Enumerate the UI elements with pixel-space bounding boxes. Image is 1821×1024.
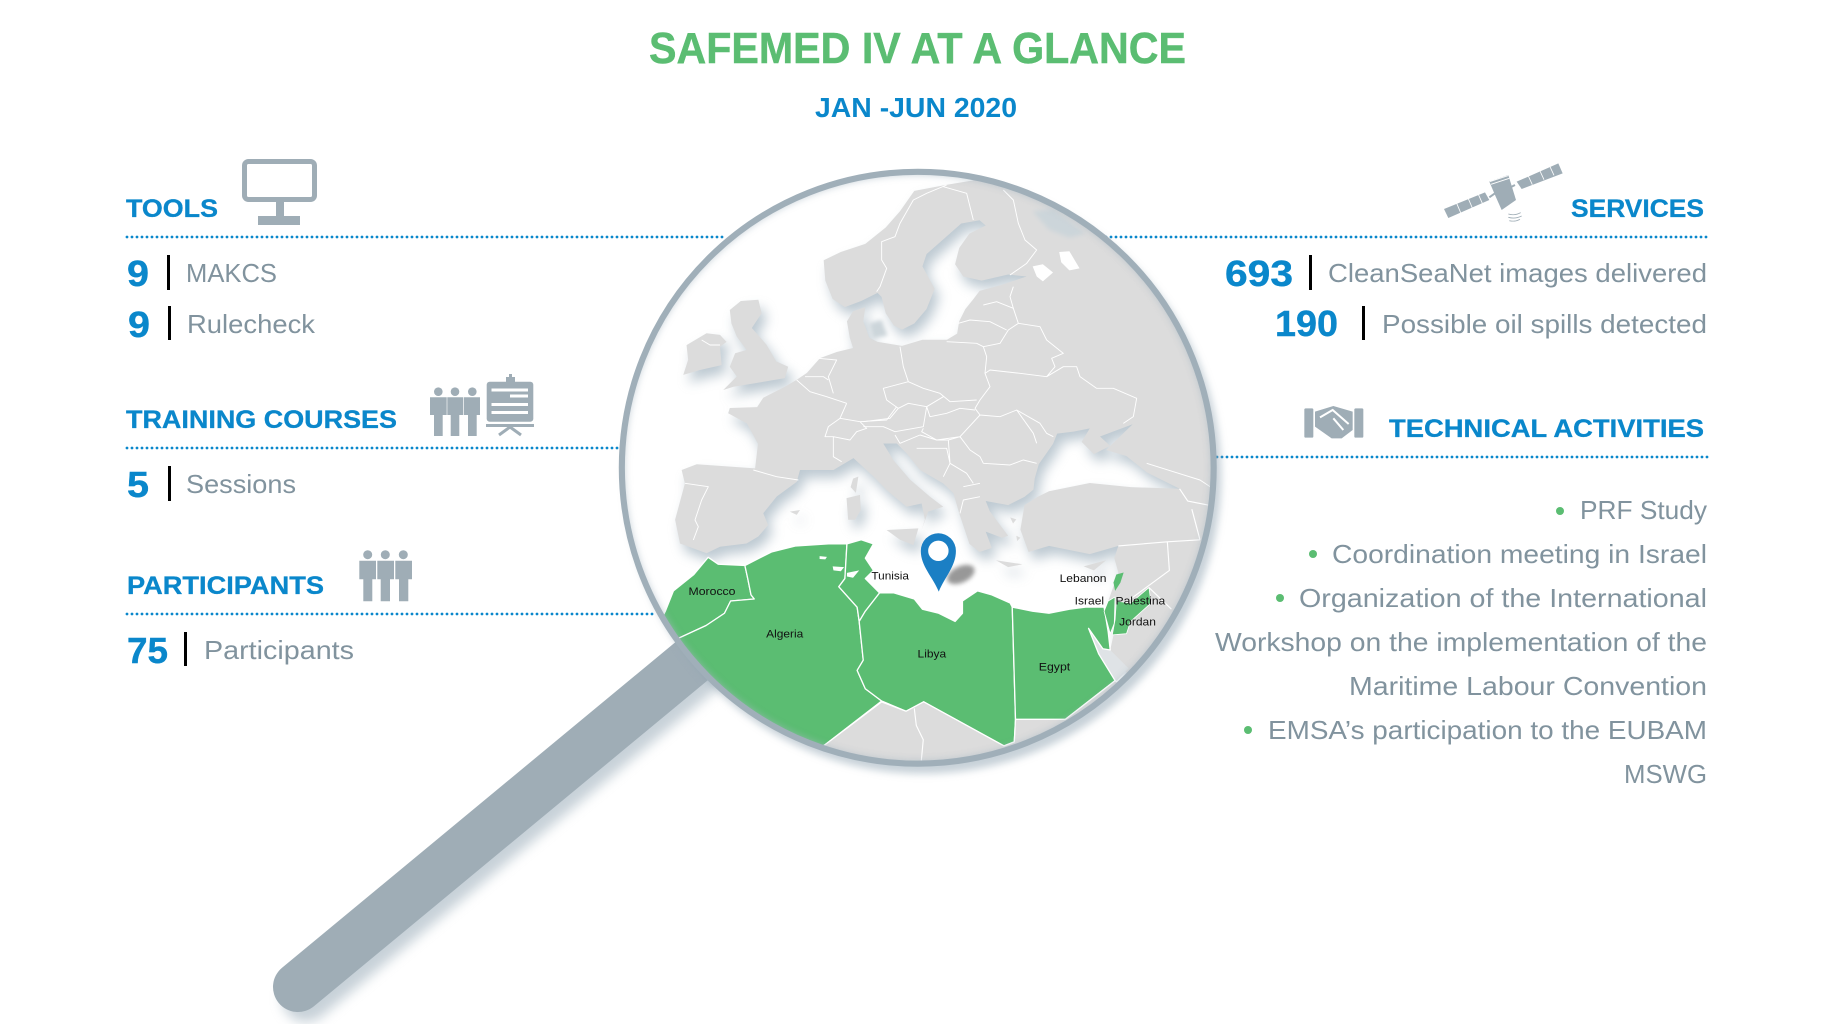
- magnifying glass lens with map: [618, 168, 1225, 778]
- Libya: [857, 591, 1016, 746]
- borders: Turkey and Middle East: [1118, 489, 1208, 609]
- bullet list: Workshop on the implementation of the: [1215, 627, 1707, 657]
- stat: Rulecheck: [128, 304, 316, 345]
- stat: Rulecheck: 9: [128, 304, 150, 345]
- stat: participants: Participants: [204, 635, 354, 665]
- lens ring: [622, 172, 1214, 764]
- icon: satellite: [1444, 163, 1563, 221]
- icon: three people: [359, 550, 412, 601]
- stat: MAKCS: [127, 253, 277, 294]
- borders: [863, 185, 1210, 487]
- icon: people and board: [430, 374, 534, 436]
- Egypt: [1012, 607, 1115, 719]
- country labels: Algeria: [766, 628, 804, 640]
- panel: tools: [126, 162, 726, 345]
- Saharan lakes: [820, 556, 859, 578]
- country labels: Palestina: [1116, 595, 1166, 607]
- bullet list: [1215, 495, 1707, 789]
- inland lakes and seas: [1033, 251, 1080, 281]
- country labels: Egypt: [1039, 661, 1071, 673]
- stat: possible oil spills: [1275, 303, 1707, 344]
- heading: services: SERVICES: [1571, 195, 1704, 223]
- stat: CleanSeaNet images: 693: [1225, 253, 1293, 294]
- heading: tools: TOOLS: [126, 195, 218, 223]
- title: SAFEMED IV AT A GLANCE: [649, 24, 1186, 73]
- country labels: Morocco: [689, 586, 736, 598]
- panel: participants: [127, 550, 655, 671]
- stat: MAKCS: MAKCS: [186, 258, 277, 288]
- Algeria: [679, 544, 881, 745]
- bullet list: PRF Study: [1580, 495, 1707, 525]
- map of Europe and the Mediterranean: [625, 175, 1211, 761]
- heading: technical activities: TECHNICAL ACTIVITIES: [1389, 415, 1704, 443]
- heading: participants: PARTICIPANTS: [127, 572, 324, 600]
- Red Sea and Gulf of Suez: [1092, 634, 1128, 681]
- icon: handshake: [1304, 406, 1363, 438]
- bullet list: EMSA’s participation to the EUBAM: [1268, 715, 1707, 745]
- Israel and Palestine: [1104, 597, 1115, 634]
- stat: participants: [127, 630, 354, 671]
- country labels: Tunisia: [871, 570, 910, 582]
- bullet list: MSWG: [1624, 759, 1707, 789]
- country labels: Jordan: [1119, 617, 1156, 629]
- panel: services: [1106, 163, 1708, 344]
- stat: sessions: 5: [127, 464, 149, 505]
- Jordan: [1112, 588, 1151, 635]
- panel: technical activities: [1215, 406, 1708, 789]
- bullet list: Organization of the International: [1299, 583, 1707, 613]
- panel: training courses: [126, 374, 621, 505]
- icon: monitor: [244, 162, 314, 225]
- heading: training courses: TRAINING COURSES: [126, 406, 397, 434]
- stat: possible oil spills: Possible oil spills detected: [1382, 309, 1707, 339]
- stat: participants: 75: [127, 630, 168, 671]
- Lebanon: [1113, 572, 1124, 591]
- Tunisia: [839, 540, 880, 621]
- stat: CleanSeaNet images: CleanSeaNet images delivered: [1328, 258, 1707, 288]
- stat: sessions: [127, 464, 296, 505]
- country labels: Libya: [918, 648, 947, 660]
- country labels: [689, 570, 1166, 673]
- stat: CleanSeaNet images: [1225, 253, 1707, 294]
- stat: sessions: Sessions: [186, 469, 296, 499]
- green North Africa and Levant: [664, 540, 1152, 745]
- stat: MAKCS: 9: [127, 253, 149, 294]
- country labels: Lebanon: [1060, 573, 1107, 585]
- country labels: Israel: [1075, 595, 1104, 607]
- subtitle: period: JAN -JUN 2020: [815, 92, 1017, 123]
- magnifying glass handle: [298, 617, 748, 998]
- stat: possible oil spills: 190: [1275, 303, 1338, 344]
- bullet list: Coordination meeting in Israel: [1332, 539, 1707, 569]
- Morocco: [664, 556, 753, 638]
- grey Sudan and Chad: [824, 680, 1116, 760]
- bullet list: Maritime Labour Convention: [1349, 671, 1707, 701]
- stat: Rulecheck: Rulecheck: [187, 309, 316, 339]
- icon: location pin: [921, 533, 978, 592]
